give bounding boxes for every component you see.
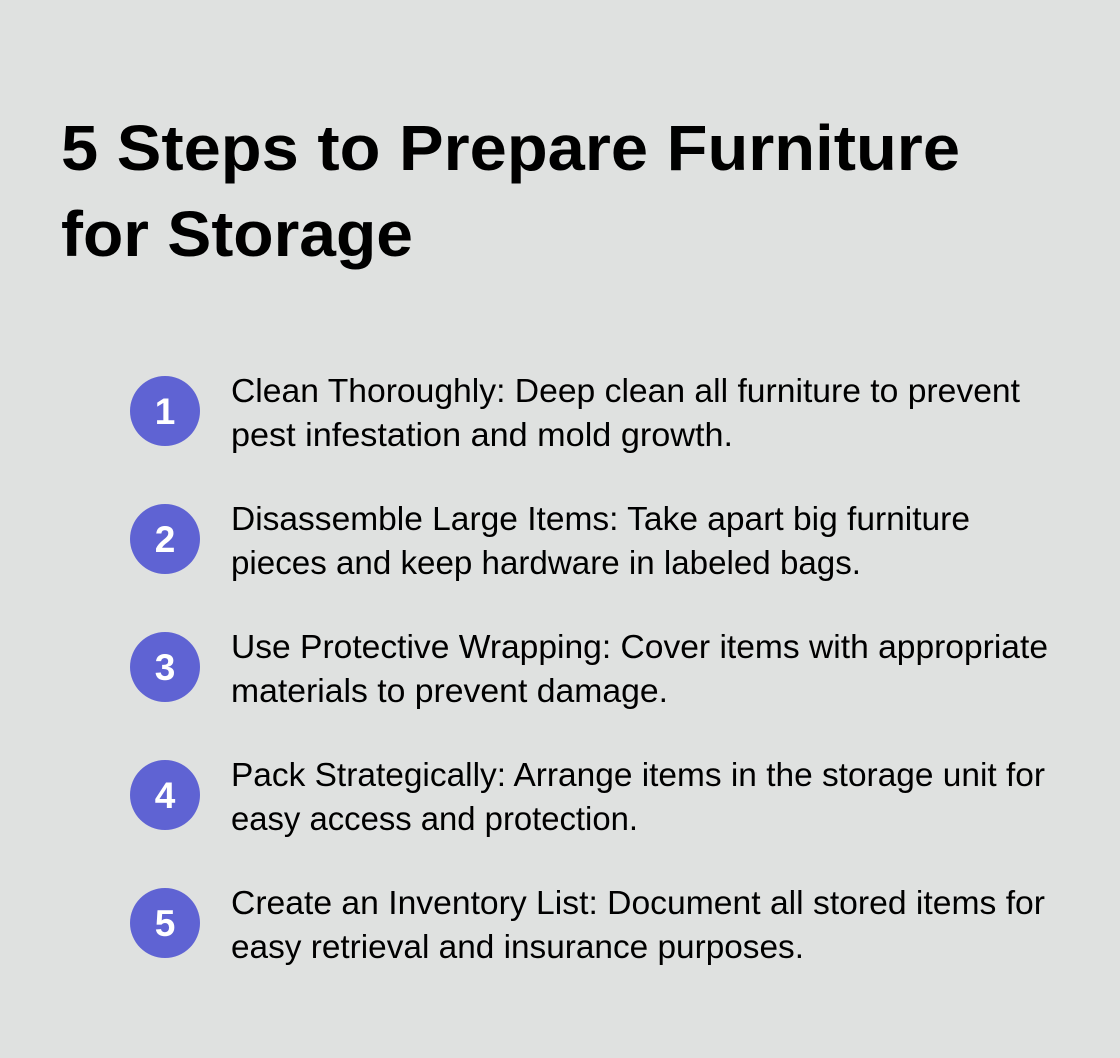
- number badge 5: 5: [155, 903, 175, 944]
- step 1 text: pest infestation and mold growth.: [231, 416, 733, 453]
- step 4 text: easy access and protection.: [231, 800, 638, 837]
- number badge 2: [130, 504, 200, 574]
- step 5 text: [231, 884, 1045, 965]
- number badge 3: 3: [155, 647, 175, 688]
- step 5 text: easy retrieval and insurance purposes.: [231, 928, 804, 965]
- step 1: [130, 372, 1020, 453]
- step 4 text: [231, 756, 1045, 837]
- steps list: [130, 372, 1048, 965]
- step 1 text: [231, 372, 1020, 453]
- number badge 1: [130, 376, 200, 446]
- step 3 text: [231, 628, 1048, 709]
- number badge 4: 4: [155, 775, 176, 816]
- step 2 text: [231, 500, 970, 581]
- step 3 text: materials to prevent damage.: [231, 672, 668, 709]
- step 3 text: Use Protective Wrapping: Cover items with appropriate: [231, 628, 1048, 665]
- step 4: [130, 756, 1045, 837]
- title: 5 Steps to Prepare Furniture: [61, 112, 960, 184]
- step 1 text: Clean Thoroughly: Deep clean all furniture to prevent: [231, 372, 1020, 409]
- number badge 4: [130, 760, 200, 830]
- number badge 5: [130, 888, 200, 958]
- step 3: [130, 628, 1048, 709]
- number badge 1: 1: [155, 391, 175, 432]
- title: [61, 112, 960, 270]
- step 5: [130, 884, 1045, 965]
- step 2 text: pieces and keep hardware in labeled bags.: [231, 544, 861, 581]
- step 5 text: Create an Inventory List: Document all stored items for: [231, 884, 1045, 921]
- title: for Storage: [61, 198, 413, 270]
- number badge 2: 2: [155, 519, 175, 560]
- number badge 3: [130, 632, 200, 702]
- step 2 text: Disassemble Large Items: Take apart big furniture: [231, 500, 970, 537]
- step 4 text: Pack Strategically: Arrange items in the storage unit for: [231, 756, 1045, 793]
- step 2: [130, 500, 970, 581]
